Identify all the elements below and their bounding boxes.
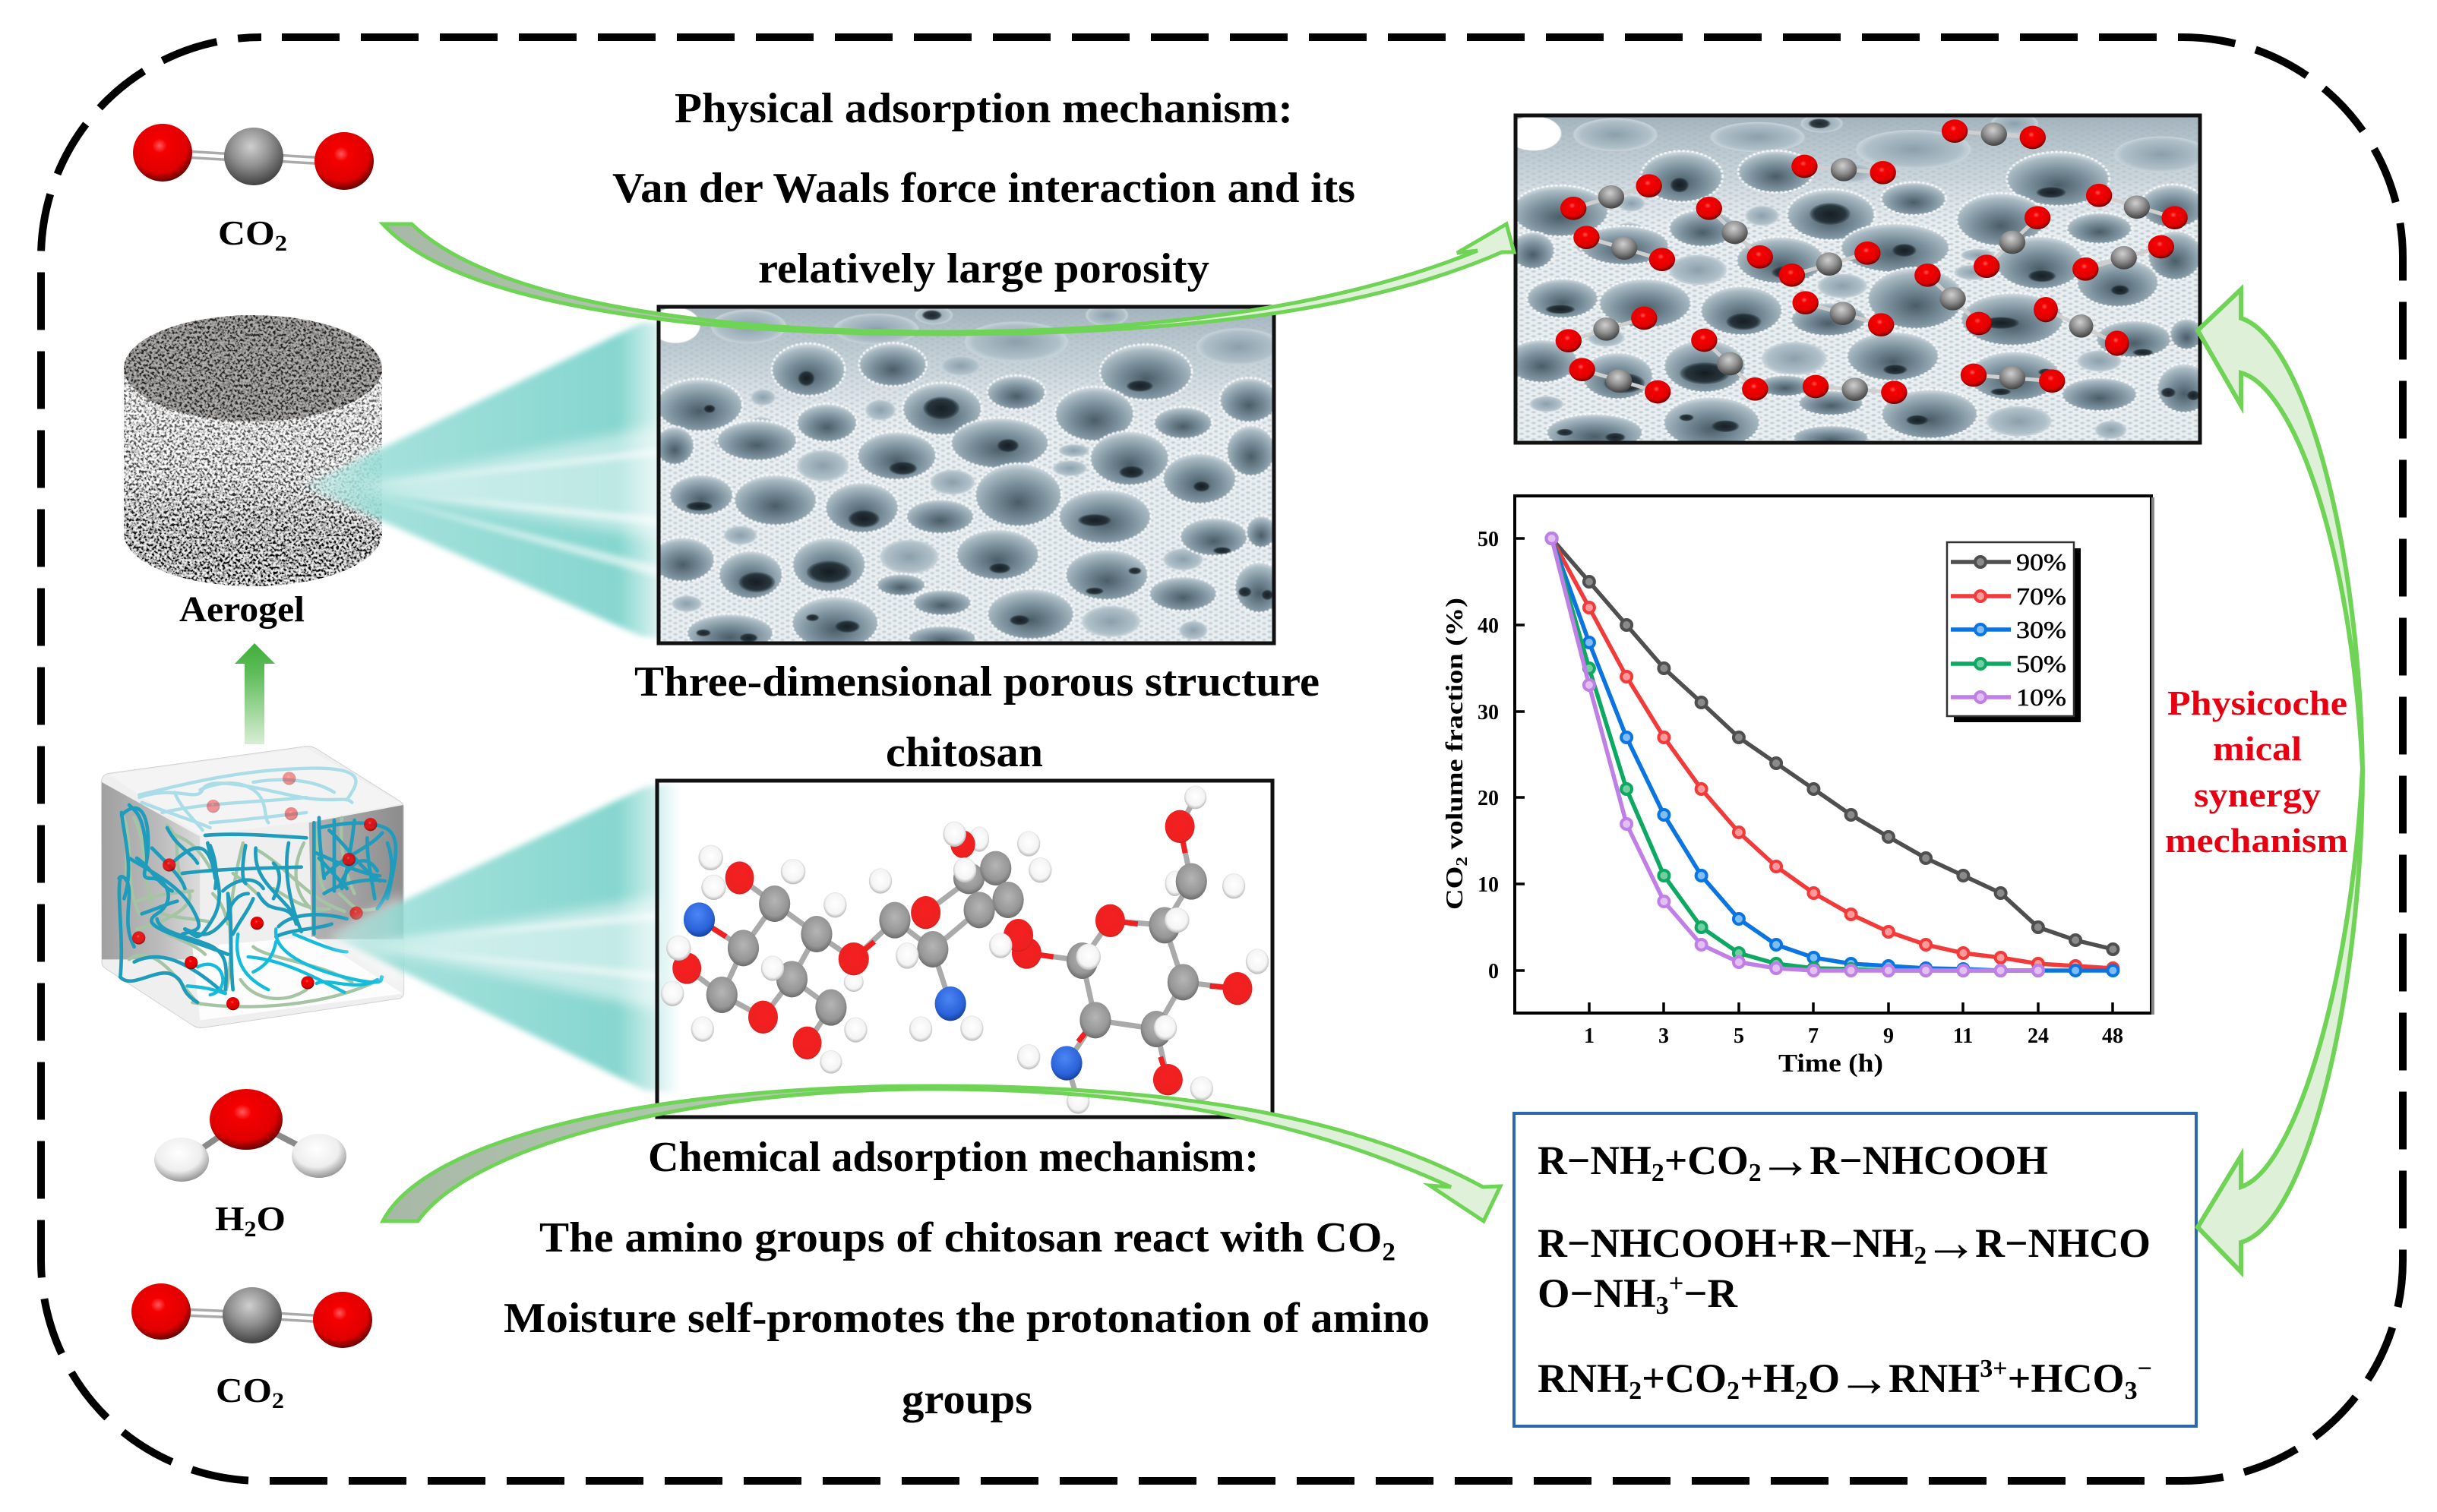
label: CO2 top: 2	[275, 231, 287, 256]
CO2 molecules on pores	[1556, 119, 2188, 404]
equation 3: −	[2138, 1355, 2152, 1383]
y tick labels: 20	[1478, 787, 1499, 810]
polymer fibers: top pale	[139, 769, 356, 830]
photo: porous aerogel structure	[651, 305, 1284, 652]
x tick labels: 24	[2028, 1024, 2049, 1048]
y tick labels: 40	[1478, 614, 1499, 638]
y tick labels: 50	[1478, 528, 1499, 551]
icon: CO2 molecule bottom	[131, 1283, 372, 1348]
legend	[1947, 542, 2081, 722]
label: CO2 bottom: 2	[272, 1388, 284, 1413]
icon: CO2 molecule top	[133, 124, 374, 190]
equation 3: 2	[1727, 1377, 1740, 1405]
equation 2 continued: +	[1669, 1270, 1683, 1298]
polymer fibers: cyan	[119, 805, 396, 1002]
caption: chitosan: chitosan	[886, 729, 1043, 776]
chitosan atoms	[661, 786, 1269, 1114]
equation 1: +CO	[1664, 1138, 1749, 1183]
equation 1: R−NHCOOH	[1810, 1138, 2048, 1183]
series: 90%	[1552, 538, 2113, 949]
y tick labels: 10	[1478, 873, 1499, 897]
y axis title: 2	[1452, 857, 1471, 866]
equation 1: 2	[1652, 1159, 1664, 1187]
label: H2O: H	[215, 1199, 242, 1238]
light beam: aerogel to pore image	[304, 323, 661, 638]
y axis title: CO	[1440, 873, 1468, 910]
equation 3: 3+	[1980, 1355, 2008, 1383]
arrow: synergy double arc upper	[2198, 289, 2363, 769]
chart: CO2 volume fraction vs time	[1440, 496, 2153, 1078]
legend: 90%	[2016, 548, 2066, 576]
label: H2O: O	[257, 1199, 286, 1238]
equation 3: RNH	[1889, 1356, 1980, 1401]
y tick labels	[1478, 528, 1499, 983]
label: physicochemical synergy mechanism: mical	[2213, 729, 2302, 768]
label: CO2 bottom: CO	[216, 1371, 268, 1409]
ions: red spheres	[132, 772, 377, 1010]
heading: physical adsorption mechanism: relatively large porosity	[758, 245, 1209, 292]
x tick labels: 3	[1658, 1024, 1669, 1048]
legend: 10%	[2016, 683, 2066, 711]
x tick labels	[1584, 1024, 2123, 1048]
series: 30%	[1552, 538, 2113, 971]
equation 3: 2	[1795, 1377, 1808, 1405]
icon: aerogel cylinder	[122, 311, 384, 589]
panel: chitosan molecular model	[657, 781, 1272, 1117]
equation 3: +CO	[1642, 1356, 1727, 1401]
x tick labels: 9	[1883, 1024, 1894, 1048]
polymer fibers: bright cyan floor	[188, 929, 382, 995]
heading: physical adsorption mechanism	[612, 85, 1355, 292]
x tick labels: 11	[1953, 1024, 1973, 1048]
heading: physical adsorption mechanism: Physical adsorption mechanism:	[675, 85, 1293, 132]
x tick labels: 5	[1734, 1024, 1744, 1048]
equation 2: R−NHCO	[1975, 1220, 2151, 1266]
series: 50%	[1552, 538, 2038, 971]
equation 3: RNH	[1538, 1356, 1629, 1401]
equation 2: 2	[1914, 1242, 1927, 1270]
legend: 50%	[2016, 650, 2066, 677]
x tick labels: 7	[1808, 1024, 1819, 1048]
label: CO2 top: CO	[218, 213, 270, 252]
label: physicochemical synergy mechanism: mechanism	[2165, 821, 2348, 860]
equation 2 continued: 3	[1656, 1292, 1669, 1320]
equation 2 continued: O−NH	[1538, 1271, 1655, 1316]
heading: chemical adsorption mechanism: groups	[902, 1376, 1032, 1423]
equation 3: 3	[2125, 1377, 2138, 1405]
equation 2: R−NHCOOH+R−NH	[1538, 1220, 1915, 1266]
label: H2O: 2	[244, 1217, 257, 1242]
axis ticks	[1515, 538, 2113, 1013]
y tick labels: 0	[1488, 960, 1499, 983]
arrow: CO2 and water chemical adsorption	[383, 1086, 1500, 1221]
legend: 70%	[2016, 582, 2066, 610]
heading: chemical adsorption mechanism: Moisture self-promotes the protonation of amino	[504, 1295, 1430, 1342]
photo: porous structure with adsorbed CO2	[1506, 113, 2211, 451]
legend: 30%	[2016, 616, 2066, 643]
arrow: up green	[235, 643, 275, 744]
equation 3: +H	[1740, 1356, 1795, 1401]
equation 3: +HCO	[2008, 1356, 2125, 1401]
x axis title: Time (h)	[1778, 1050, 1883, 1078]
heading: chemical adsorption mechanism: Chemical adsorption mechanism:	[648, 1134, 1259, 1181]
equation 1: →	[1759, 1129, 1813, 1190]
label: physicochemical synergy mechanism	[2165, 683, 2348, 860]
x tick labels: 1	[1584, 1024, 1595, 1048]
heading: chemical adsorption mechanism	[504, 1134, 1430, 1423]
light beam: cube to chitosan molecule	[328, 782, 680, 1094]
equation 3: →	[1837, 1347, 1892, 1408]
y tick labels: 30	[1478, 701, 1499, 724]
equation 2 continued: −R	[1683, 1271, 1738, 1316]
y axis title: volume fraction (%)	[1440, 598, 1468, 857]
x tick labels: 48	[2102, 1024, 2123, 1048]
equation 3: 2	[1629, 1377, 1642, 1405]
icon: hydrogel cube with polymer network	[101, 747, 404, 1027]
equation 1: 2	[1749, 1159, 1762, 1187]
polymer fibers: pale green	[124, 818, 380, 1007]
label: physicochemical synergy mechanism: synergy	[2194, 775, 2321, 814]
panel: reaction equations	[1514, 1113, 2196, 1426]
equation 3: O	[1808, 1356, 1840, 1401]
arrow: synergy double arc lower	[2198, 769, 2363, 1272]
label: physicochemical synergy mechanism: Physicoche	[2167, 683, 2347, 722]
arrow: CO2 physical adsorption	[383, 224, 1514, 334]
heading: physical adsorption mechanism: Van der Waals force interaction and its	[612, 165, 1355, 212]
equation 1: R−NH	[1538, 1138, 1652, 1183]
heading: chemical adsorption mechanism: The amino groups of chitosan react with CO₂	[539, 1214, 1396, 1261]
series: 70%	[1552, 538, 2113, 968]
icon: water molecule	[154, 1089, 346, 1182]
label: Aerogel: Aerogel	[179, 589, 305, 630]
equation 2: →	[1923, 1212, 1978, 1273]
series: 10%	[1552, 538, 2038, 971]
caption: three-dimensional porous structure: Three-dimensional porous structure	[634, 658, 1320, 705]
